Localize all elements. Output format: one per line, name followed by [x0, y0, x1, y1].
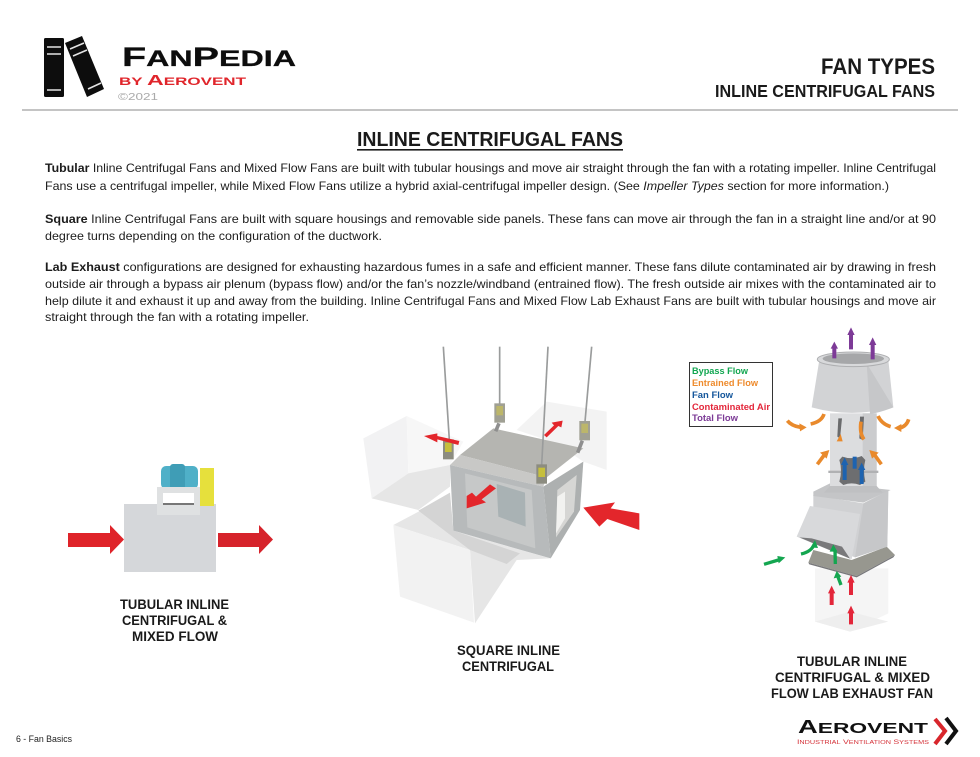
icon: motor: [161, 464, 198, 490]
text block: lab exhaust: [45, 260, 936, 324]
icon: books logo: [44, 36, 104, 97]
legend: [690, 362, 772, 426]
diagram: lab exhaust fan: [764, 327, 909, 632]
text block: lab exhaust: outside air through a bypass air plenum (bypass flow) and/or the fan’s nozzle/windband (entrained flow). The fresh outside air mixes with the contaminated air to: [45, 277, 936, 291]
title: INLINE CENTRIFUGAL FANS: [357, 129, 623, 151]
text block: lab exhaust: help dilute it and exhaust it up and away from the building. Inline Centrifugal Fans and Mixed Flow Lab Exhaust Fans are built with tubular housings and move air: [45, 294, 936, 308]
arrow: left outlet: [424, 433, 459, 445]
arrow: front outlet: [467, 484, 496, 508]
logo: Aerovent: INDUSTRIAL V ENTILATION S YSTEMS: [797, 740, 930, 746]
belt guard: [200, 468, 214, 506]
logo: FanPedia by Aerovent: ©2021: [118, 92, 159, 103]
text block: tubular: Tubular Inline Centrifugal Fans and Mixed Flow Fans are built with tubular housings and move air straight through the fan with a rotating impeller. Inline Centrifugal: [45, 161, 936, 175]
arrow: inlet: [583, 502, 639, 530]
footer page number: 6 - Fan Basics: [16, 734, 72, 744]
motor bracket: [157, 487, 200, 515]
logo: Aerovent: [797, 717, 956, 746]
diagram: tubular inline fan: [68, 464, 273, 572]
curb base: [808, 547, 895, 577]
legend: Fan Flow: [692, 390, 733, 400]
legend: Total Flow: [692, 413, 738, 423]
legend: Contaminated Air: [692, 402, 771, 412]
logo: FanPedia by Aerovent: F AN P EDIA: [122, 42, 296, 72]
arrows: total flow: [831, 327, 876, 359]
label: lab exhaust fan: CENTRIFUGAL & MIXED: [775, 670, 930, 685]
label: square inline: [457, 643, 560, 674]
legend: Entrained Flow: [692, 378, 758, 388]
label: lab exhaust fan: FLOW LAB EXHAUST FAN: [771, 686, 933, 701]
fan column: [824, 413, 883, 493]
text block: tubular: [45, 161, 936, 193]
label: tubular inline: [120, 597, 229, 644]
hanger rods: [443, 347, 592, 465]
text block: square: degree turns depending on the configuration of the ductwork.: [45, 229, 382, 243]
plenum box: [797, 483, 891, 559]
arrows: entrained flow: [787, 414, 909, 464]
text block: lab exhaust: Lab Exhaust configurations are designed for exhausting hazardous fumes in a safe and efficient manner. These fans dilute contaminated air by drawing in fresh: [45, 260, 936, 274]
label: square inline: CENTRIFUGAL: [462, 659, 554, 674]
logo: FanPedia by Aerovent: BY A EROVENT: [119, 72, 246, 89]
text block: square: Square Inline Centrifugal Fans are built with square housings and removable side panels. These fans can move air through the fan in a straight line and/or at 90: [45, 212, 936, 226]
label: lab exhaust fan: [771, 654, 933, 701]
legend: Bypass Flow: [692, 366, 748, 376]
arrow: right outlet: [544, 421, 563, 437]
label: tubular inline: TUBULAR INLINE: [120, 597, 229, 612]
label: square inline: SQUARE INLINE: [457, 643, 560, 658]
arrows: fan flow: [841, 457, 865, 484]
ghost duct below fan: [815, 568, 888, 632]
diagram: square inline fan: [363, 347, 639, 623]
label: lab exhaust fan: TUBULAR INLINE: [797, 654, 907, 669]
text block: lab exhaust: straight through the fan with a rotating impeller.: [45, 310, 309, 324]
logo: FanPedia by Aerovent: [118, 42, 296, 103]
windband: [812, 352, 893, 414]
spring isolators: [443, 403, 590, 484]
duct housing: [124, 504, 216, 572]
text block: square: [45, 212, 936, 243]
arrow: inlet: [68, 525, 124, 554]
arrows: contaminated air: [828, 575, 855, 624]
ghost ductwork: [363, 402, 607, 623]
heading: inline centrifugal fans subtitle: INLINE CENTRIFUGAL FANS: [715, 81, 935, 101]
logo: Aerovent: A EROVENT: [798, 717, 928, 737]
fan cabinet: [450, 428, 583, 558]
text block: tubular: Fans use a centrifugal impeller, while Mixed Flow Fans utilize a hybrid axial-centrifugal impeller design. (See Impeller Types section for more information.): [45, 179, 889, 193]
arrows: bypass flow: [764, 540, 841, 585]
heading: fan types: FAN TYPES: [821, 54, 935, 79]
label: tubular inline: MIXED FLOW: [132, 629, 218, 644]
label: tubular inline: CENTRIFUGAL &: [122, 613, 227, 628]
arrow: outlet: [218, 525, 273, 554]
